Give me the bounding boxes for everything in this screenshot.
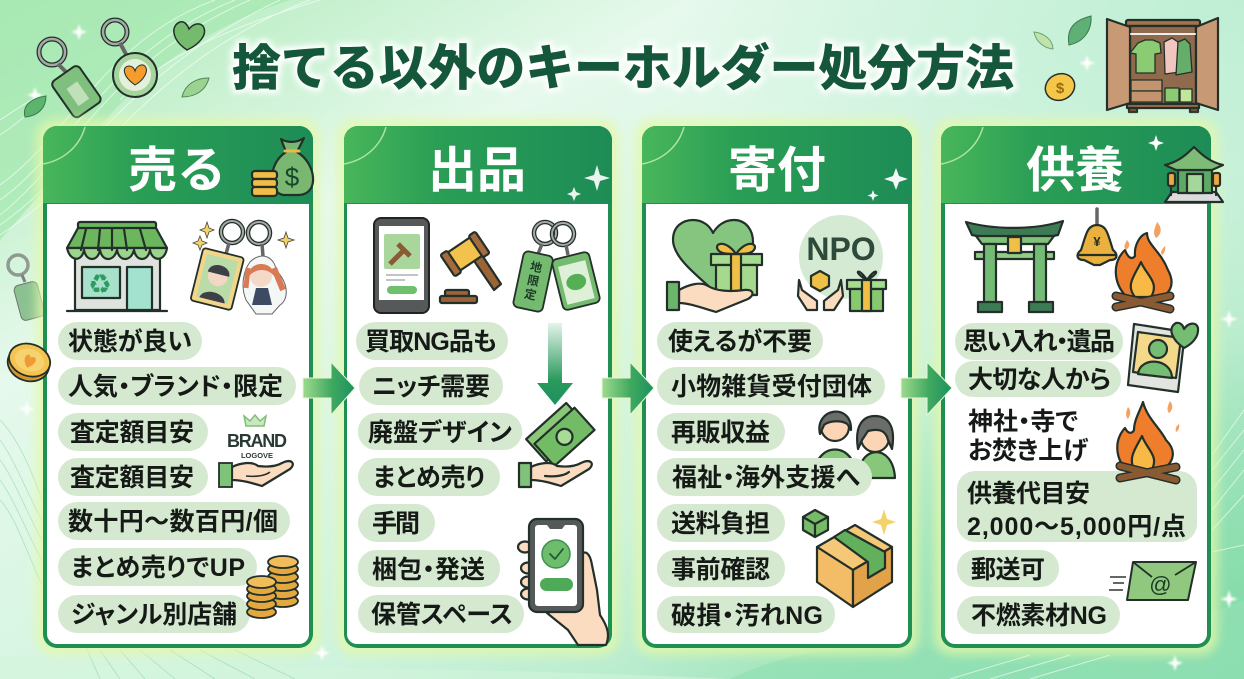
list: 寄付: 事前確認 <box>671 556 770 584</box>
list: 寄付: 再販収益 <box>671 419 770 447</box>
list: 売る: 状態が良い <box>68 327 192 356</box>
icon: brand logo on hand: LOGOVE <box>241 451 273 460</box>
icon: limited keychains: 定 <box>523 287 538 303</box>
list: 寄付: 使えるが不要 <box>668 327 812 356</box>
icon: keychain heart <box>103 20 157 97</box>
list: 供養: 供養代目安 <box>967 480 1090 508</box>
list: 売る: まとめ売りでUP <box>71 554 245 582</box>
list: 出品: 買取NG品も <box>365 328 497 356</box>
arrow: down <box>537 323 573 405</box>
icon: gavel <box>440 231 501 303</box>
icon: bell <box>1078 209 1116 265</box>
heading: 寄付: 寄付 <box>728 144 826 198</box>
panel: 売る <box>36 119 320 655</box>
panel: 供養 <box>934 119 1223 655</box>
icon: hand holding smartphone <box>518 519 608 645</box>
icon: leaves and coin top right: $ <box>1056 80 1065 97</box>
icon: bonfire <box>1116 222 1172 309</box>
arrow: 売る to 出品 <box>303 362 355 415</box>
heading: 売る: 売る <box>128 144 226 198</box>
list: 売る: 人気・ブランド・限定 <box>68 372 283 401</box>
list: 出品: 保管スペース <box>371 601 513 629</box>
icon: bonfire 2 <box>1117 401 1179 480</box>
icon: memorial photo <box>1128 323 1198 392</box>
list: 売る: 数十円～数百円/個 <box>68 508 278 536</box>
list: 売る: ジャンル別店舗 <box>71 601 237 629</box>
list: 供養: 不燃素材NG <box>971 602 1107 630</box>
list: 出品: 手間 <box>372 510 420 538</box>
list: 寄付: 福祉・海外支援へ <box>672 464 861 492</box>
list: 供養: 郵送可 <box>971 556 1045 584</box>
list: 売る <box>58 322 296 633</box>
icon: torii <box>966 221 1063 312</box>
icon: leaves and coin top right <box>1034 16 1091 105</box>
icon: leaves top left <box>24 78 209 117</box>
icon: wardrobe <box>1107 18 1218 112</box>
list: 供養: お焚き上げ <box>968 437 1089 465</box>
list: 寄付 <box>657 322 885 633</box>
list: 出品: 廃盤デザイン <box>368 418 512 447</box>
icon: NPO badge: NPO <box>806 231 876 267</box>
icon: recycle shop <box>67 222 167 311</box>
icon: limited keychains <box>513 222 601 313</box>
icon: sparkles <box>868 168 908 201</box>
list: 寄付: 破損・汚れNG <box>671 602 823 630</box>
icon: limited keychains: 地 <box>529 258 544 275</box>
list: 供養 <box>955 323 1197 634</box>
icon: keychain tag top left <box>39 39 103 119</box>
arrow: 寄付 to 供養 <box>901 362 952 415</box>
icon: recycle shop: ♻ <box>90 273 110 296</box>
icon: sparkle <box>1148 135 1164 151</box>
panel: 寄付 <box>635 119 919 655</box>
list: 供養: 思い入れ・遺品 <box>963 328 1115 356</box>
list: 売る: 査定額目安 <box>70 464 194 492</box>
icon: heart and gift on hand <box>667 220 762 312</box>
icon: coin left <box>3 338 55 387</box>
list: 出品: 梱包・発送 <box>372 556 485 584</box>
title: 捨てる以外のキーホルダー処分方法 <box>232 41 1014 96</box>
list: 供養: 神社・寺で <box>968 408 1078 436</box>
icon: cash on hand <box>519 401 595 487</box>
list: 出品: まとめ売り <box>373 464 485 492</box>
icon: shrine <box>1165 147 1223 202</box>
icon: bell: ¥ <box>1093 234 1101 249</box>
panel: 出品 <box>337 119 619 655</box>
icon: sparkle <box>872 509 896 535</box>
icon: money bag and coins <box>252 138 313 196</box>
icon: limited keychains: 限 <box>526 273 541 289</box>
icon: character keychains <box>190 221 294 314</box>
icon: people <box>813 412 895 478</box>
icon: green heart <box>174 22 205 50</box>
icon: faded keychain left <box>8 255 46 321</box>
heading: 出品: 出品 <box>428 144 526 198</box>
icon: cardboard boxes <box>803 510 892 607</box>
list: 供養: 2,000～5,000円/点 <box>967 513 1186 541</box>
list: 売る: 査定額目安 <box>70 419 194 447</box>
icon: money bag and coins: $ <box>285 162 300 192</box>
icon: brand logo on hand: BRAND <box>227 431 287 451</box>
icon: coin stacks <box>247 556 298 618</box>
list: 供養: 大切な人から <box>968 366 1111 394</box>
icon: brand logo on hand <box>219 415 293 487</box>
list: 出品: ニッチ需要 <box>372 373 490 401</box>
icon: mail envelope: @ <box>1149 572 1171 597</box>
arrow: 出品 to 寄付 <box>602 362 654 415</box>
icon: auction smartphone <box>374 218 429 313</box>
icon: NPO badge <box>798 215 886 311</box>
icon: mail envelope <box>1109 562 1196 600</box>
list: 出品 <box>356 322 524 633</box>
icon: sparkles <box>567 165 610 201</box>
heading: 供養: 供養 <box>1026 144 1124 198</box>
list: 寄付: 送料負担 <box>671 510 770 538</box>
list: 寄付: 小物雑貨受付団体 <box>671 373 872 401</box>
title: 捨てる以外のキーホルダー処分方法 <box>232 41 1014 96</box>
